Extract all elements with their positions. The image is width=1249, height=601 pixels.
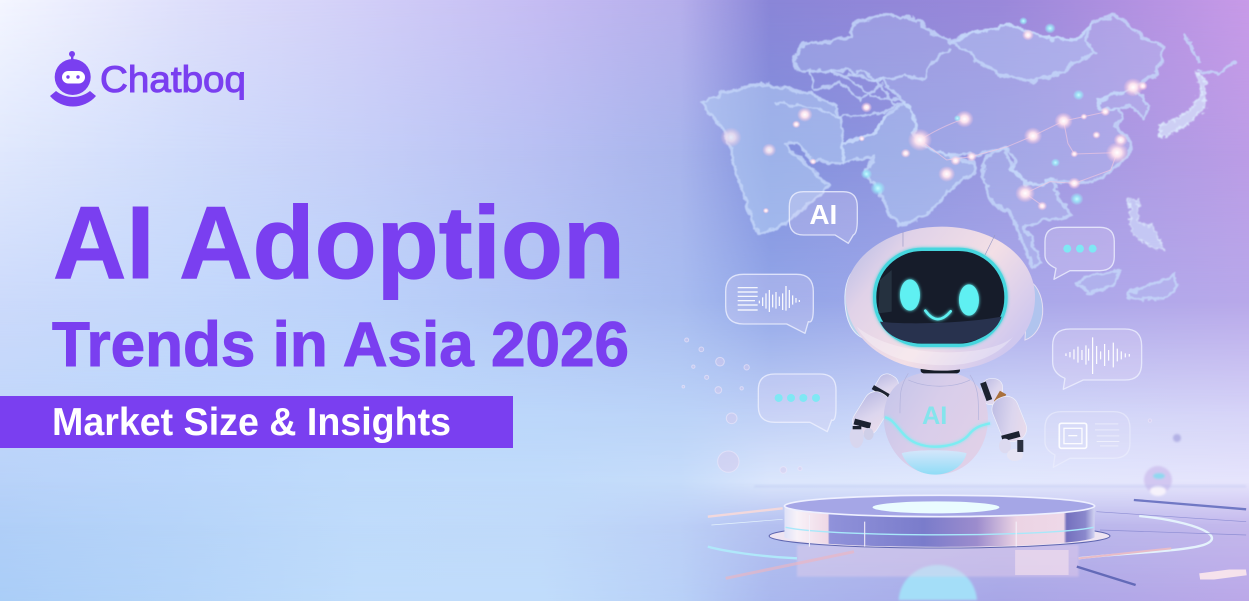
- eye left: [900, 279, 920, 311]
- head: [846, 227, 1035, 371]
- logo: Chatboq: Chatboq: [100, 59, 246, 100]
- glass sphere right: [1144, 434, 1181, 496]
- screen: [875, 249, 1006, 345]
- floating bubbles: [682, 338, 1152, 473]
- platform: [708, 485, 1246, 600]
- three dots: [1063, 245, 1097, 253]
- bubble: left waveform: [726, 274, 813, 333]
- speech bubbles: [726, 192, 1142, 467]
- left arm: [848, 371, 902, 448]
- Philippines and islands: [1128, 198, 1164, 250]
- belly glow panel: [902, 450, 967, 475]
- bubble: document: [1045, 412, 1130, 467]
- glowing city dots: [720, 17, 1148, 214]
- robot mascot: [845, 227, 1043, 475]
- map of Asia: [701, 14, 1235, 298]
- torso: [884, 372, 990, 475]
- Japan: [1159, 72, 1205, 137]
- smile: [925, 311, 951, 319]
- document icon: [1059, 423, 1119, 448]
- bubble: right waveform: [1053, 329, 1142, 389]
- ear left: [845, 265, 863, 338]
- right waveform icon: [1066, 337, 1129, 374]
- trade route lines: [920, 112, 1117, 206]
- teal chest line: [885, 417, 990, 447]
- banner strip: Market Size & Insights: [0, 396, 513, 448]
- ear right: [1025, 280, 1043, 340]
- bubble: four dots: [758, 374, 836, 432]
- chest label AI: AI: [922, 402, 947, 430]
- neck: [921, 366, 960, 373]
- right arm: [980, 379, 1030, 461]
- bubble: AI: [789, 192, 857, 243]
- left waveform icon: [738, 286, 799, 312]
- logo: Chatboq: [50, 51, 246, 106]
- title: AI Adoption: AI Adoption: [53, 185, 625, 300]
- banner strip: Market Size & Insights: Market Size & Insights: [52, 401, 451, 444]
- four dots: [775, 394, 820, 402]
- eye right: [959, 284, 979, 316]
- bubble: three dots: [1045, 227, 1114, 279]
- label: AI in bubble: AI: [809, 199, 837, 230]
- subtitle: Trends in Asia 2026: Trends in Asia 2026: [52, 310, 629, 380]
